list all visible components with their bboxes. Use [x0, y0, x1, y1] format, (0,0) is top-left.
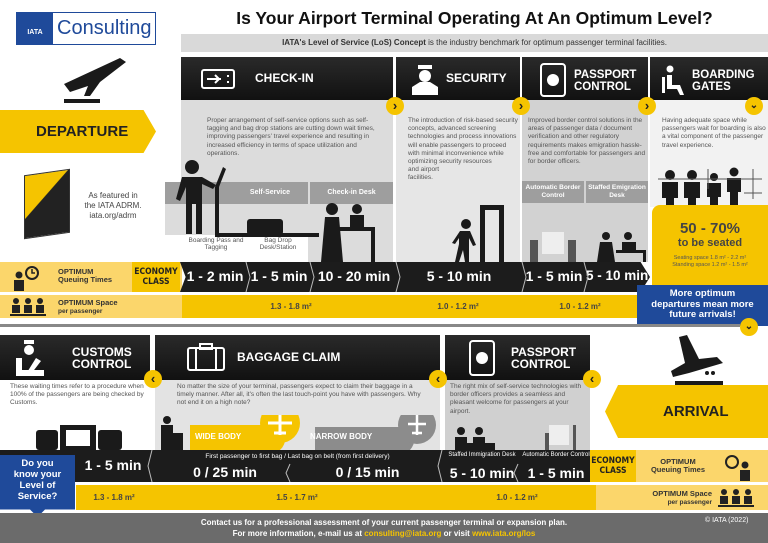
departure space row: per passenger — [58, 308, 102, 315]
callout: 50-70% seated: Standing space 1.2 m² - 1.5 m² — [672, 262, 748, 268]
departure queuing row: 5 - 10 min — [427, 268, 491, 284]
panel: check-in: CHECK-IN — [255, 71, 314, 85]
panel: passport control arrival — [445, 335, 590, 450]
divider — [0, 324, 740, 327]
departure arrow — [0, 110, 156, 153]
callout: do you know your level of service: Service? — [18, 491, 57, 502]
callout: do you know your level of service: Do you — [21, 458, 54, 469]
arrival queuing row: Staffed Immigration Desk — [448, 452, 516, 458]
arrival queuing row: Queuing Times — [651, 465, 705, 474]
panel: check-in: Check-in Desk — [327, 189, 376, 196]
callout: 50-70% seated — [652, 205, 768, 287]
callout: 50-70% seated: 50 - 70% — [680, 220, 740, 237]
panel: baggage claim: BAGGAGE CLAIM — [237, 350, 340, 364]
arrival queuing row — [0, 450, 768, 482]
panel: passport control departure: PASSPORT — [574, 69, 636, 81]
arrival queuing row: 0 / 25 min — [193, 464, 257, 480]
chevrons arrival: ‹ — [151, 371, 155, 386]
panel: security: SECURITY — [446, 71, 507, 85]
departure queuing row — [0, 262, 650, 292]
text: › — [645, 98, 649, 113]
panel: passport control departure: CONTROL — [574, 81, 631, 93]
book — [24, 169, 70, 239]
text: ‹ — [590, 371, 594, 386]
arrival queuing row: CLASS — [599, 466, 627, 476]
arrival queuing row: First passenger to first bag / Last bag on belt (from first delivery) — [205, 453, 390, 460]
panel: baggage claim: NARROW BODY — [310, 432, 372, 441]
arrival queuing row: OPTIMUM — [660, 457, 696, 466]
departure space row: OPTIMUM Space — [58, 298, 118, 307]
arrival queuing row: 1 - 5 min — [528, 465, 584, 481]
panel: check-in: Bag Drop Desk/Station — [260, 237, 296, 251]
departure queuing row: 5 - 10 min — [586, 268, 648, 283]
arrival space row: 1.0 - 1.2 m² — [496, 493, 538, 502]
panel: boarding gates — [650, 57, 768, 207]
chevrons departure — [386, 97, 404, 115]
panel: passport control arrival: CONTROL — [511, 357, 570, 371]
panel: security — [396, 57, 520, 262]
departure space row: 1.0 - 1.2 m² — [437, 302, 479, 311]
panel: customs control: CUSTOMS — [72, 345, 132, 359]
departure space row — [0, 295, 637, 318]
footer — [0, 513, 768, 543]
panel: passport control departure: Improved border control solutions in the areas of passenger data / document verification and other regulatory requirements makes emigration hassle-free and comfortable for passengers and for border officers. — [528, 117, 645, 165]
panel: check-in: Boarding Pass and Tagging — [189, 237, 243, 251]
callout: do you know your level of service — [0, 455, 75, 517]
panel: passport control departure: Staffed Emigration Desk — [588, 184, 646, 199]
departure arrow: DEPARTURE — [36, 123, 128, 140]
panel: passport control departure: Automatic Border Control — [526, 184, 580, 199]
text: › — [519, 98, 523, 113]
callout: do you know your level of service: Level of — [20, 480, 55, 491]
text: ⌄ — [750, 100, 758, 111]
panel: passport control arrival: The right mix of self-service technologies with border officers provides a seamless and pleasant welcome for passengers at your airport. — [450, 383, 581, 415]
panel: boarding gates: BOARDING — [692, 69, 755, 81]
callout: 50-70% seated: Seating space 1.8 m² - 2.2 m² — [674, 255, 746, 261]
footer: © IATA (2022) — [705, 517, 748, 524]
callout: more optimum departures — [637, 285, 768, 326]
panel: boarding gates: Having adequate space while passengers wait for boarding is also a vital component of the passenger travel experience. — [662, 117, 766, 149]
chevrons arrival — [144, 370, 162, 388]
panel: check-in: Self-Service — [250, 189, 290, 196]
departure queuing row: OPTIMUM — [58, 267, 93, 276]
subtitle bar — [181, 34, 768, 52]
arrival queuing row: 5 - 10 min — [450, 465, 514, 481]
callout: more optimum departures: departures mean more — [651, 298, 754, 310]
departure queuing row: 1 - 5 min — [251, 268, 307, 284]
panel: security: facilities. — [408, 174, 433, 181]
panel: baggage claim: WIDE BODY — [195, 432, 241, 441]
departure space row: 1.3 - 1.8 m² — [270, 302, 312, 311]
panel: check-in — [181, 57, 393, 262]
title: Is Your Airport Terminal Operating At An Optimum Level? — [236, 8, 713, 28]
footer: Contact us for a professional assessment of your current passenger terminal or expansion plan. — [201, 518, 567, 527]
arrival queuing row: 0 / 15 min — [336, 464, 399, 480]
panel: check-in: Proper arrangement of self-service options such as self-tagging and bag drop stations are cutting down wait times, improving passengers' travel experience and resulting in increased efficiency in terms of space utilization and operations. — [207, 117, 375, 157]
callout: do you know your level of service: know your — [14, 469, 61, 480]
arrival arrow — [605, 385, 768, 438]
featured text: As featured in the IATA ADRM. iata.org/adrm — [84, 191, 142, 220]
departure queuing row: CLASS — [142, 277, 170, 287]
icon: departure plane — [64, 58, 126, 103]
text: ⌄ — [745, 321, 753, 332]
footer: For more information, e-mail us at consulting@iata.org or visit www.iata.org/los — [233, 529, 535, 538]
arrival space row: 1.3 - 1.8 m² — [93, 493, 135, 502]
departure queuing row: 1 - 2 min — [187, 268, 243, 284]
arrival queuing row: Automatic Border Control — [522, 452, 590, 458]
arrival queuing row: 1 - 5 min — [85, 457, 141, 473]
arrival queuing row: ECONOMY — [591, 456, 635, 466]
text: ‹ — [436, 371, 440, 386]
panel: baggage claim: No matter the size of your terminal, passengers expect to claim their baggage in a timely manner. After all, it's often the last touch-point you have with passengers. Why not end it on a high note? — [177, 383, 421, 406]
panel: security: The introduction of risk-based security concepts, advanced screening technologies and process innovations will enable passengers to proceed with minimal inconvenience while optimizing security resources — [408, 117, 518, 165]
icon: arrival plane — [671, 335, 723, 385]
panel: passport control arrival: PASSPORT — [511, 345, 576, 359]
departure queuing row: 1 - 5 min — [526, 268, 582, 284]
logo: Consulting — [57, 17, 152, 39]
arrival space row — [76, 485, 768, 510]
arrival arrow: ARRIVAL — [663, 403, 729, 420]
callout: more optimum departures: More optimum — [670, 288, 735, 299]
panel: passport control departure — [522, 57, 648, 262]
panel: customs control: These waiting times refer to a procedure when 100% of the passengers are being checked by Customs. — [10, 383, 144, 406]
departure queuing row: 10 - 20 min — [318, 268, 390, 284]
callout: 50-70% seated: to be seated — [678, 237, 742, 249]
panel: customs control: CONTROL — [72, 357, 131, 371]
departure queuing row: Queuing Times — [58, 275, 112, 284]
logo: IATA — [27, 29, 43, 36]
departure queuing row: ECONOMY — [134, 267, 178, 277]
arrival space row: per passenger — [668, 499, 712, 506]
departure space row: 1.0 - 1.2 m² — [559, 302, 601, 311]
chevrons departure: › — [393, 98, 397, 113]
logo — [16, 12, 156, 45]
callout: more optimum departures: future arrivals! — [669, 309, 736, 320]
panel: security: and airport — [408, 166, 439, 173]
arrival space row: OPTIMUM Space — [652, 489, 712, 498]
panel: boarding gates: GATES — [692, 81, 731, 93]
panel: baggage claim — [155, 335, 440, 450]
subtitle bar: IATA's Level of Service (LoS) Concept is the industry benchmark for optimum passenger terminal facilities. — [282, 38, 667, 47]
panel: customs control — [0, 335, 150, 450]
arrival space row: 1.5 - 1.7 m² — [276, 493, 318, 502]
